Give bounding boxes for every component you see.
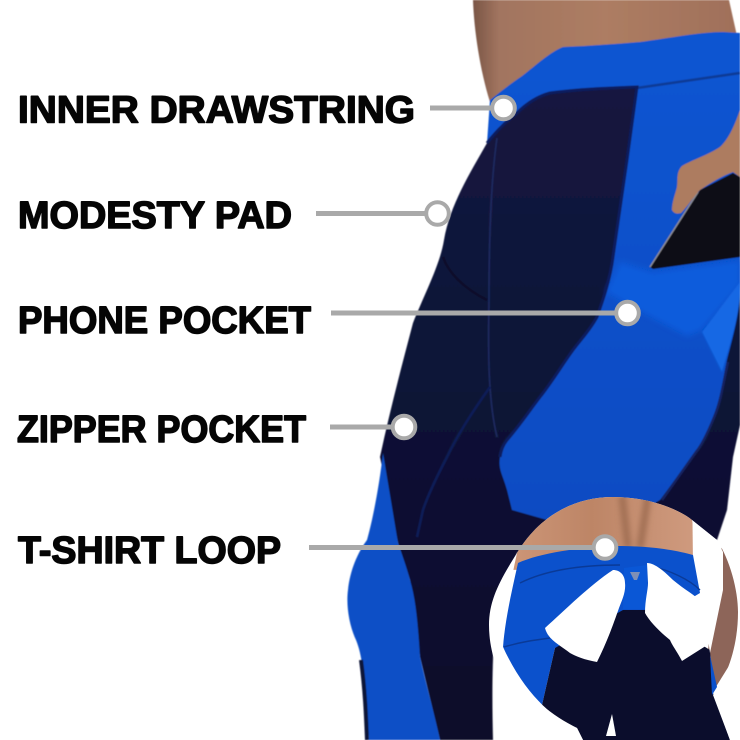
waist seam: [637, 73, 740, 88]
navy seat: [542, 610, 730, 740]
torso skin: [473, 0, 737, 102]
centre blue tab: [623, 565, 647, 609]
label: modesty pad: MODESTY PAD: [18, 195, 292, 237]
centre leg seam: [489, 138, 497, 437]
inset photo content: [503, 497, 738, 740]
right towel: [645, 563, 712, 661]
callout: phone pocket: [18, 300, 639, 342]
inset white panel on right: [692, 520, 723, 653]
callout: inner drawstring: [18, 90, 515, 132]
leader line: [316, 211, 428, 216]
label: zipper pocket: ZIPPER POCKET: [17, 409, 306, 451]
white gap between legs: [606, 714, 616, 736]
side stripe highlight: [702, 282, 740, 372]
marker: [393, 416, 415, 438]
navy leg base: [380, 84, 740, 740]
label: t-shirt loop: T-SHIRT LOOP: [18, 530, 281, 572]
calf blue panel: [347, 453, 440, 740]
pocket highlight: [606, 260, 740, 336]
modesty pad curve: [443, 257, 487, 300]
callout: t-shirt loop: [18, 530, 616, 572]
blue back waist: [503, 546, 700, 705]
marker: [492, 97, 515, 119]
callout: modesty pad: [18, 195, 449, 237]
phone: [650, 173, 740, 269]
label: inner drawstring: INNER DRAWSTRING: [18, 90, 415, 132]
inset circle: t-shirt loop close-up: [489, 480, 740, 740]
photo: athlete wearing tights: [347, 0, 740, 740]
thigh seam: [417, 387, 490, 537]
calf outer seam: [361, 660, 367, 740]
callout: zipper pocket: [17, 409, 415, 451]
leader line: [330, 424, 394, 430]
logo on tab: [630, 572, 640, 580]
inset white backing: [489, 497, 738, 740]
marker: [426, 202, 449, 225]
leader line: [331, 310, 618, 316]
right arm: [708, 548, 738, 686]
marker: [616, 302, 639, 324]
waist seam line: [504, 565, 700, 647]
back skin: [513, 497, 693, 570]
side seam: [662, 362, 728, 500]
marker: [594, 536, 616, 559]
phone edge: [650, 192, 698, 267]
spine shadow: [622, 495, 648, 548]
navy panel seam: [487, 87, 637, 457]
blue waistband and side panel: [487, 32, 740, 535]
label: phone pocket: PHONE POCKET: [18, 300, 311, 342]
left towel: [545, 570, 625, 662]
leader line: [430, 106, 492, 110]
hand: [672, 110, 740, 214]
right blue sliver: [710, 655, 717, 695]
leader line: [309, 545, 595, 550]
